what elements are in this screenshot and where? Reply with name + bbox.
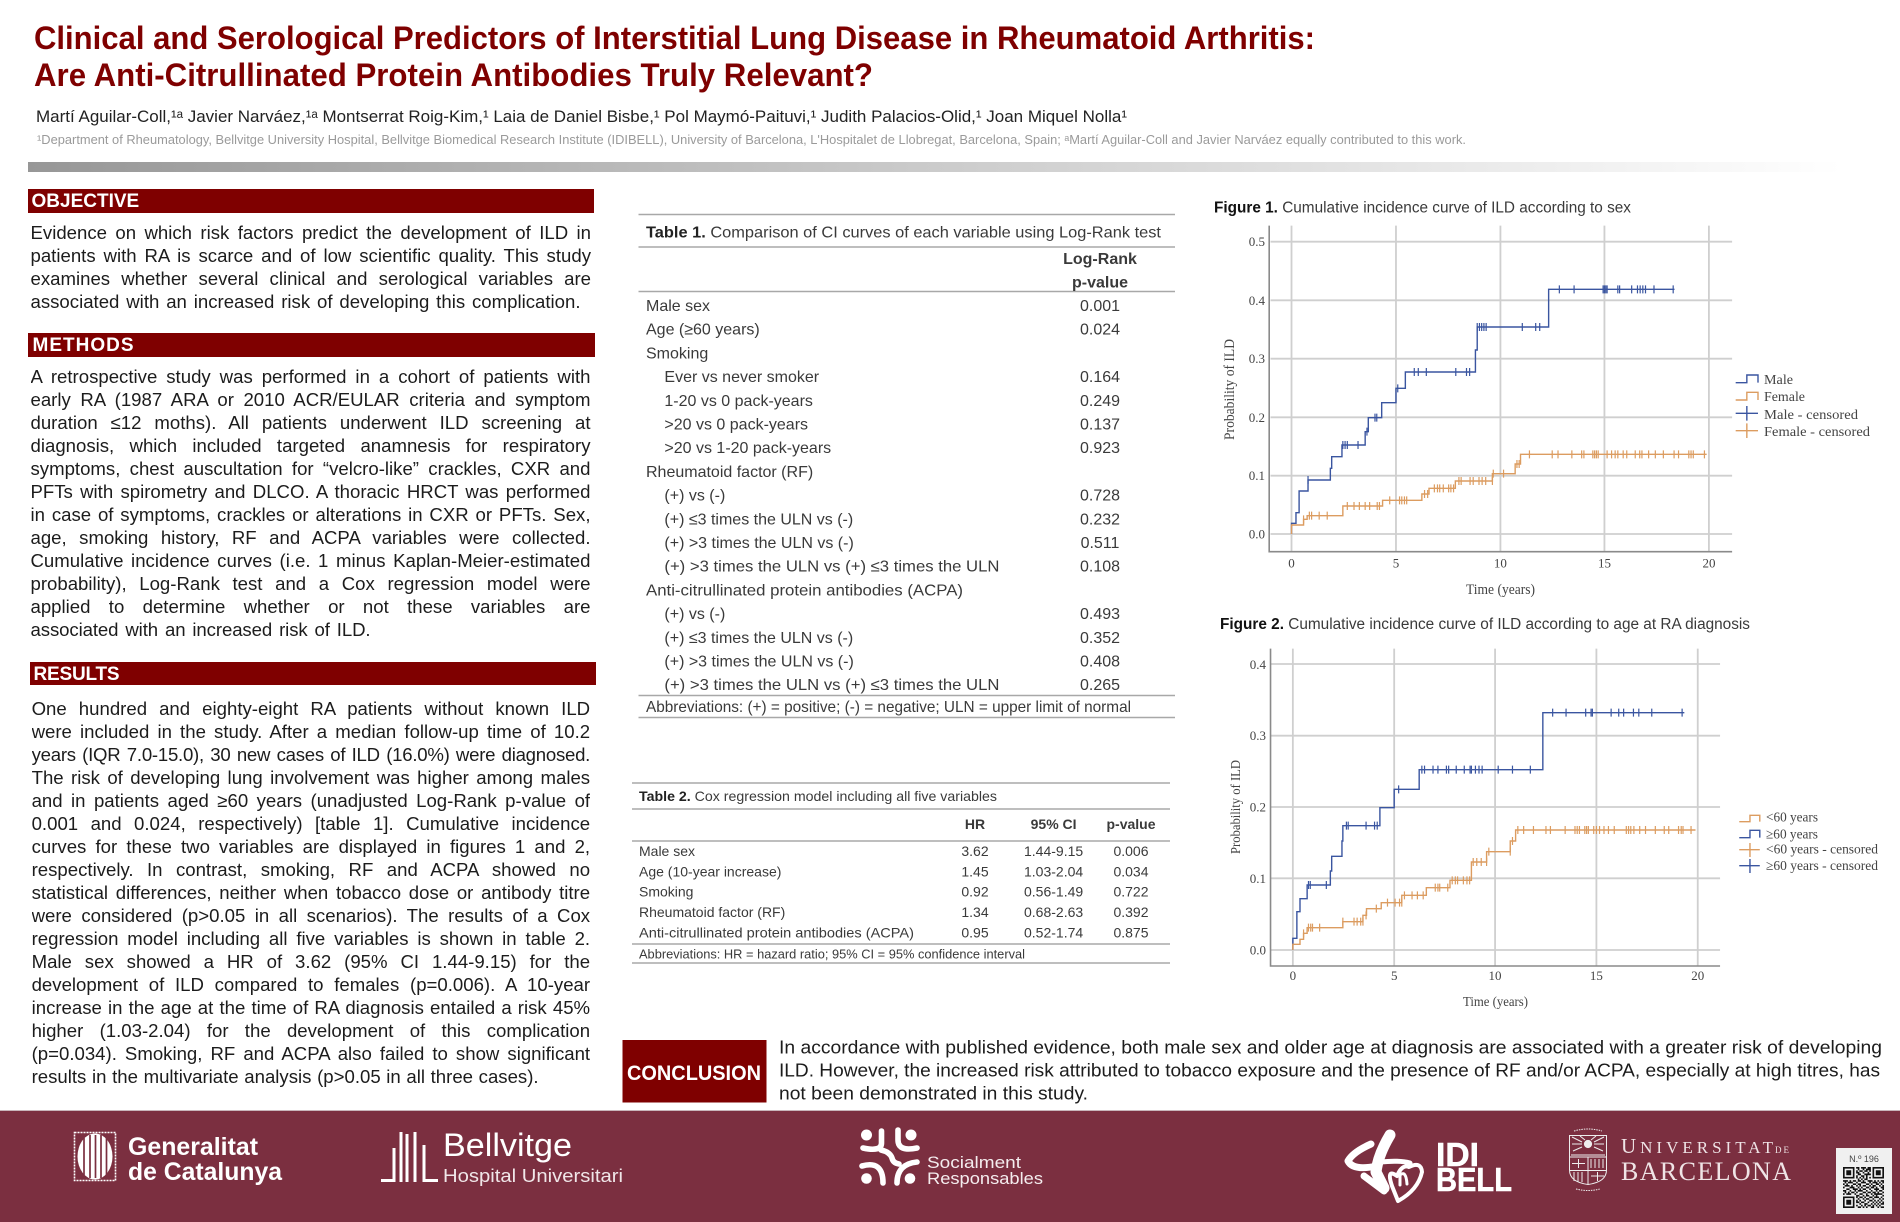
table 1 header: [1063, 251, 1137, 292]
figure 1 legend symbols: [1736, 375, 1758, 438]
table 1 row labels: (+) >3 times the ULN vs (-): [664, 654, 854, 670]
methods text: early RA (1987 ARA or 2010 ACR/EULAR criteria and symptom: [30, 388, 590, 410]
objective heading: OBJECTIVE: [32, 190, 139, 212]
table 2 row labels: [639, 843, 914, 941]
table 2 abbreviations: Abbreviations: HR = hazard ratio; 95% CI = 95% confidence interval: [639, 947, 1025, 962]
methods heading: [28, 332, 595, 356]
table 1 row labels: Age (≥60 years): [646, 322, 760, 339]
logo: Universitat de Barcelona: BARCELONA: [1621, 1157, 1791, 1186]
table 2 header: [965, 816, 1156, 832]
table 1 p-values: 0.923: [1080, 440, 1120, 457]
table 1 row labels: (+) vs (-): [664, 488, 725, 505]
figure 1 legend labels: Male - censored: [1764, 408, 1858, 423]
logo: Generalitat de Catalunya: [74, 1132, 283, 1186]
methods text: applied to determine whether or not these variables are: [30, 596, 590, 616]
table 1 row labels: (+) >3 times the ULN vs (-): [664, 535, 854, 552]
table 1 header: Log-Rank: [1063, 251, 1137, 268]
methods text: associated with an increased risk of ILD.: [30, 618, 370, 640]
figure 1 legend labels: Male: [1764, 373, 1793, 388]
table 1 p-values: 0.265: [1080, 677, 1120, 694]
table 2 row labels: Smoking: [639, 884, 693, 900]
icon: IDIBELL brush mark: [1348, 1135, 1422, 1201]
figure 1 y axis ticks: 0.1: [1249, 468, 1265, 483]
figure 1 legend labels: [1764, 373, 1870, 440]
table 1 row labels: (+) ≤3 times the ULN vs (-): [664, 630, 853, 647]
table 1 p-values: 0.408: [1080, 654, 1120, 670]
figure 1 x axis ticks: [1288, 556, 1716, 570]
table 1 caption: Table 1. Comparison of CI curves of each variable using Log-Rank test: [646, 224, 1162, 242]
figure 1 y axis ticks: 0.0: [1249, 526, 1265, 542]
figure 2 y axis ticks: 0.2: [1250, 800, 1266, 814]
logo: Socialment Responsables: Socialment: [927, 1153, 1021, 1172]
conclusion text: In accordance with published evidence, both male sex and older age at diagnosis are associated with a greater risk of developing: [779, 1036, 1882, 1058]
results text: were included in the study. After a median follow-up time of 10.2: [32, 720, 590, 742]
table 1 p-values: 0.001: [1080, 298, 1120, 315]
table 1 header: p-value: [1072, 274, 1128, 292]
logo: Bellvitge Hospital Universitari: Hospital Universitari: [443, 1166, 623, 1186]
methods text: diagnosis, which included targeted anamnesis for respiratory: [30, 434, 590, 456]
female curve: [1292, 450, 1707, 534]
chart: cumulative incidence by age: [1271, 649, 1760, 966]
table 2 values: 0.392: [1113, 904, 1149, 920]
results text: years (IQR 7.0-15.0), 30 new cases of ILD (16.0%) were diagnosed.: [32, 744, 590, 764]
panel: table 1: [638, 214, 1175, 718]
table 2 values: 0.92: [961, 884, 989, 900]
male curve: [1292, 285, 1675, 534]
results heading: RESULTS: [34, 664, 119, 685]
figure 1 y axis ticks: 0.2: [1249, 410, 1265, 425]
results text: higher (1.03-2.04) for the development of this complication: [32, 1020, 590, 1040]
figure 2 y axis ticks: 0.0: [1250, 942, 1266, 958]
figure 2 x axis ticks: 20: [1691, 968, 1704, 983]
figure 2 y axis ticks: 0.4: [1250, 657, 1266, 672]
figure 2 legend labels: ≥60 years - censored: [1766, 859, 1878, 874]
figure 2 x axis ticks: 0: [1290, 968, 1296, 983]
table 2 values: 0.006: [1113, 843, 1149, 859]
figure 1 y axis ticks: 0.5: [1249, 234, 1265, 249]
footer band: [0, 1110, 1900, 1222]
panel: results: [30, 662, 596, 1087]
table 2 values: 0.034: [1113, 864, 1149, 880]
figure 2 x axis title: Time (years): [1463, 995, 1528, 1010]
panel: figure 1: [1214, 200, 1870, 598]
table 2 values: 0.56-1.49: [1024, 884, 1083, 900]
poster number and QR code: [1836, 1148, 1892, 1214]
conclusion label box: CONCLUSION: [627, 1062, 761, 1085]
figure 1 y axis ticks: [1249, 234, 1266, 542]
table 1 row labels: 1-20 vs 0 pack-years: [664, 393, 813, 410]
figure 2 legend labels: [1766, 811, 1878, 874]
results text: Male sex showed a HR of 3.62 (95% CI 1.44-9.15) for the: [32, 950, 590, 972]
table 2 header: 95% CI: [1031, 816, 1077, 832]
title: Are Anti-Citrullinated Protein Antibodies Truly Relevant?: [34, 57, 873, 93]
table 1 row labels: >20 vs 1-20 pack-years: [664, 440, 831, 457]
panel: table 2: [632, 783, 1170, 963]
methods text: Cumulative incidence curves (i.e. 1 minus Kaplan-Meier-estimated: [30, 550, 590, 570]
figure 2 caption: Figure 2. Cumulative incidence curve of ILD according to age at RA diagnosis: [1220, 616, 1750, 633]
figure 1 x axis ticks: 5: [1393, 556, 1399, 570]
table 2 values: 1.03-2.04: [1024, 864, 1083, 880]
objective heading: [28, 188, 594, 212]
figure 1 x axis ticks: 20: [1702, 556, 1716, 570]
results text: [32, 698, 590, 1087]
results text: statistical differences, neither when tobacco dose or antibody titre: [32, 882, 590, 902]
table 1 p-values: 0.137: [1080, 416, 1120, 434]
conclusion text: [779, 1036, 1882, 1104]
header divider: [28, 162, 1842, 172]
results text: results in the multivariate analysis (p>0.05 in all three cases).: [32, 1066, 539, 1086]
methods text: probability), Log-Rank test and a Cox regression model were: [30, 572, 590, 594]
results text: regression model including all five variables is shown in table 2.: [32, 928, 590, 948]
results heading: [30, 662, 596, 685]
objective text: associated with an increased risk of developing this complication.: [30, 291, 580, 312]
table 1 row labels: >20 vs 0 pack-years: [664, 416, 808, 434]
figure 1 legend labels: Female: [1764, 390, 1805, 405]
panel: objective: [28, 189, 594, 312]
logo: Bellvitge Hospital Universitari: [381, 1127, 623, 1186]
conclusion text: not been demonstrated in this study.: [779, 1082, 1088, 1104]
logo: IDIBELL: BELL: [1436, 1161, 1512, 1198]
results text: were considered (p>0.05 in all scenarios). The results of a Cox: [32, 904, 590, 926]
logo: Bellvitge Hospital Universitari: Bellvitge: [443, 1127, 572, 1163]
table 2 values: 0.95: [961, 925, 989, 941]
objective text: Evidence on which risk factors predict the development of ILD in: [30, 222, 591, 243]
conclusion label box: [622, 1040, 766, 1102]
table 2 values: 0.875: [1113, 925, 1149, 941]
table 1 row labels: (+) ≤3 times the ULN vs (-): [664, 511, 853, 528]
table 1 p-values: 0.728: [1080, 488, 1120, 505]
methods text: duration ≤12 moths). All patients underwent ILD screening at: [30, 412, 590, 432]
figure 1 y axis ticks: 0.4: [1249, 293, 1266, 308]
table 1 row labels: (+) >3 times the ULN vs (+) ≤3 times the ULN: [664, 677, 999, 694]
figure 2 y axis ticks: 0.1: [1250, 871, 1266, 886]
table 1 row labels: [646, 298, 999, 694]
results text: (p=0.034). Smoking, RF and ACPA also failed to show significant: [32, 1042, 590, 1064]
table 2 row labels: Male sex: [639, 843, 695, 859]
figure 2 legend labels: <60 years: [1766, 811, 1818, 826]
chart: cumulative incidence by sex: [1269, 226, 1758, 552]
table 1 p-values: 0.511: [1081, 535, 1120, 552]
methods text: PFTs with spirometry and DLCO. A thoracic HRCT was performed: [30, 480, 590, 502]
methods text: A retrospective study was performed in a cohort of patients with: [30, 366, 590, 386]
figure 1 x axis ticks: 0: [1288, 556, 1295, 570]
table 1 row labels: (+) >3 times the ULN vs (+) ≤3 times the ULN: [664, 559, 999, 576]
methods text: age, smoking history, RF and ACPA variables were collected.: [30, 526, 590, 548]
table 2 values: 0.722: [1113, 884, 1149, 900]
results text: One hundred and eighty-eight RA patients without known ILD: [32, 698, 590, 718]
table 2 values: 3.62: [961, 843, 989, 859]
table 2 row labels: Anti-citrullinated protein antibodies (ACPA): [639, 925, 914, 941]
table 1 row labels: Smoking: [646, 345, 708, 362]
logo: Universitat de Barcelona: UNIVERSITAT: [1621, 1134, 1774, 1158]
figure 1 x axis ticks: 10: [1494, 556, 1507, 570]
icon: Socialment Responsables symbol: [861, 1130, 917, 1184]
icon: Generalitat emblem: [74, 1132, 116, 1180]
table 1 p-values: 0.024: [1080, 322, 1120, 339]
table 2 caption: Table 2. Cox regression model including all five variables: [639, 788, 997, 804]
results text: respectively. In contrast, smoking, RF and ACPA showed no: [32, 858, 590, 880]
table 2 row labels: Age (10-year increase): [639, 864, 781, 880]
methods text: symptoms, chest auscultation for “velcro-like” crackles, CXR and: [30, 458, 590, 478]
authors: Martí Aguilar-Coll,¹ᵃ Javier Narváez,¹ᵃ Montserrat Roig-Kim,¹ Laia de Daniel Bisbe,¹ Pol Maymó-Paituvi,¹ Judith Palacios-Olid,¹ Joan Miquel Nolla¹: [36, 108, 1128, 126]
affiliations: ¹Department of Rheumatology, Bellvitge University Hospital, Bellvitge Biomedical Research Institute (IDIBELL), University of Barcelona, L'Hospitalet de Llobregat, Barcelona, Spain; ᵃMartí Aguilar-Coll and Javier Narváez equally contributed to this work.: [37, 132, 1466, 147]
table 1 p-values: 0.232: [1080, 511, 1120, 528]
methods heading: METHODS: [32, 334, 134, 356]
figure 1 x axis title: Time (years): [1466, 582, 1535, 598]
title: Clinical and Serological Predictors of Interstitial Lung Disease in Rheumatoid Arthritis:: [34, 20, 1315, 56]
objective text: [30, 222, 591, 312]
logo: IDIBELL: [1348, 1135, 1512, 1201]
panel: figure 2: [1220, 616, 1878, 1010]
figure 2 y axis title: Probability of ILD: [1229, 760, 1244, 854]
table 2 values: 1.44-9.15: [1024, 843, 1083, 859]
figure 1 caption: Figure 1. Cumulative incidence curve of ILD according to sex: [1214, 200, 1631, 217]
table 1 row labels: Anti-citrullinated protein antibodies (ACPA): [646, 582, 963, 599]
logo: Generalitat de Catalunya: Generalitat: [128, 1133, 259, 1161]
objective text: patients with RA is scarce and of low scientific quality. This study: [30, 245, 591, 266]
table 2 values: 1.45: [961, 864, 989, 880]
age 60 plus curve: [1293, 709, 1684, 950]
objective text: examines whether several clinical and serological variables are: [30, 268, 591, 289]
table 1 abbreviations: Abbreviations: (+) = positive; (-) = negative; ULN = upper limit of normal: [646, 699, 1131, 716]
conclusion text: ILD. However, the increased risk attributed to tobacco exposure and the presence of RF and/or ACPA, especially at high titres, has: [779, 1060, 1880, 1080]
figure 2 y axis ticks: [1250, 657, 1266, 958]
poster number and QR code: N.º 196: [1849, 1154, 1879, 1164]
logo: Socialment Responsables: [861, 1130, 1043, 1188]
table 2 header: p-value: [1106, 816, 1156, 832]
figure 1 x axis ticks: 15: [1598, 556, 1611, 570]
results text: development of ILD compared to females (p=0.006). A 10-year: [32, 974, 590, 994]
logo: Socialment Responsables: Responsables: [927, 1169, 1043, 1188]
results text: 0.001 and 0.024, respectively) [table 1]. Cumulative incidence: [32, 812, 590, 834]
figure 2 x axis ticks: 15: [1590, 968, 1603, 983]
figure 1 legend labels: Female - censored: [1764, 425, 1870, 440]
logo: Generalitat de Catalunya: de Catalunya: [128, 1158, 283, 1186]
panel: conclusion: [622, 1036, 1882, 1104]
methods text: [30, 366, 590, 640]
table 2 values: [961, 843, 1149, 941]
table 2 row labels: Rheumatoid factor (RF): [639, 904, 785, 920]
table 1 row labels: (+) vs (-): [664, 606, 725, 623]
age under 60 curve: [1293, 826, 1696, 950]
results text: The risk of developing lung involvement was higher among males: [32, 766, 590, 788]
results text: and in patients aged ≥60 years (unadjusted Log-Rank p-value of: [32, 790, 590, 810]
icon: UB shield: [1570, 1129, 1606, 1190]
table 2 values: 0.68-2.63: [1024, 904, 1083, 920]
panel: methods: [28, 333, 595, 640]
results text: curves for these two variables are displayed in figures 1 and 2,: [32, 836, 590, 856]
table 2 values: 1.34: [961, 904, 989, 920]
figure 2 y axis ticks: 0.3: [1250, 728, 1266, 743]
table 1 p-values: 0.352: [1080, 630, 1120, 647]
table 1 p-values: 0.108: [1080, 559, 1120, 576]
figure 2 x axis ticks: 5: [1391, 968, 1397, 983]
table 1 row labels: Ever vs never smoker: [664, 369, 820, 386]
table 1 p-values: 0.249: [1080, 393, 1120, 410]
logo: Universitat de Barcelona: DE: [1775, 1145, 1790, 1155]
figure 2 legend symbols: [1739, 815, 1760, 873]
figure 1 y axis title: Probability of ILD: [1222, 339, 1238, 440]
table 1 p-values: 0.493: [1080, 606, 1120, 623]
results text: increase in the age at the time of RA diagnosis entailed a risk 45%: [32, 996, 590, 1018]
figure 2 x axis ticks: [1290, 968, 1704, 983]
figure 2 x axis ticks: 10: [1488, 968, 1502, 983]
logo: IDIBELL: IDI: [1436, 1136, 1479, 1173]
table 2 values: 0.52-1.74: [1024, 925, 1083, 941]
table 2 header: HR: [965, 816, 985, 832]
figure 2 legend labels: ≥60 years: [1766, 827, 1818, 842]
logo: Universitat de Barcelona: [1570, 1129, 1791, 1190]
table 1 row labels: Male sex: [646, 298, 710, 315]
figure 2 legend labels: <60 years - censored: [1766, 842, 1878, 857]
icon: Bellvitge building: [381, 1132, 438, 1182]
table 1 p-values: [1080, 298, 1120, 694]
figure 1 y axis ticks: 0.3: [1249, 351, 1265, 366]
table 1 p-values: 0.164: [1080, 369, 1120, 386]
table 1 row labels: Rheumatoid factor (RF): [646, 464, 813, 481]
methods text: in case of symptoms, crackles or alterations in CXR or PFTs. Sex,: [30, 504, 590, 524]
icon: QR code: [1843, 1168, 1884, 1207]
title: [34, 20, 1315, 93]
